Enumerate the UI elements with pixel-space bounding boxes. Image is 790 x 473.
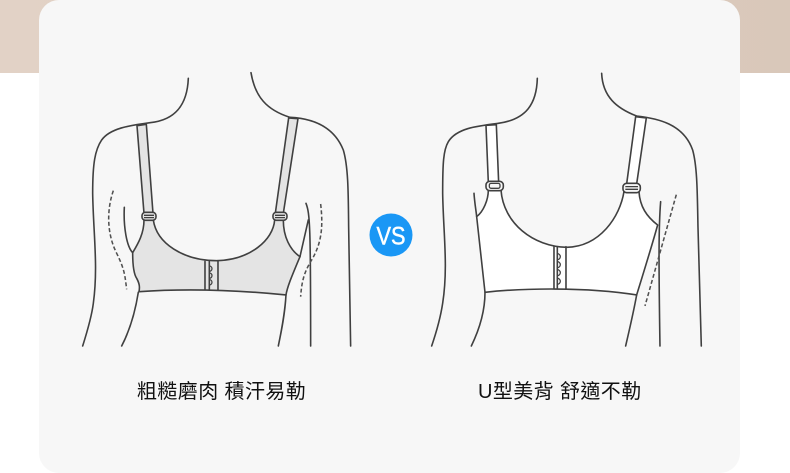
bra body bbox=[133, 220, 300, 295]
illustration: U-back bra bbox=[432, 73, 701, 346]
VS badge: VS bbox=[376, 222, 406, 250]
beige top band bbox=[0, 0, 790, 73]
straps bbox=[486, 117, 646, 184]
bra body bbox=[477, 190, 658, 295]
body outline bbox=[432, 73, 701, 346]
body outline bbox=[83, 73, 351, 346]
hook closure bbox=[205, 261, 218, 290]
diagonal dashed line bbox=[645, 195, 676, 306]
VS badge bbox=[370, 214, 412, 256]
strap buckles bbox=[486, 181, 640, 193]
caption: left: 粗糙磨肉 積汗易勒 bbox=[137, 381, 306, 403]
caption: right: U型美背 舒適不勒 bbox=[478, 381, 642, 403]
strap buckles bbox=[142, 212, 287, 220]
bulge dashed lines bbox=[109, 191, 322, 297]
straps bbox=[137, 118, 298, 213]
illustration: rough bra back bbox=[83, 73, 351, 346]
hook closure bbox=[554, 247, 566, 289]
